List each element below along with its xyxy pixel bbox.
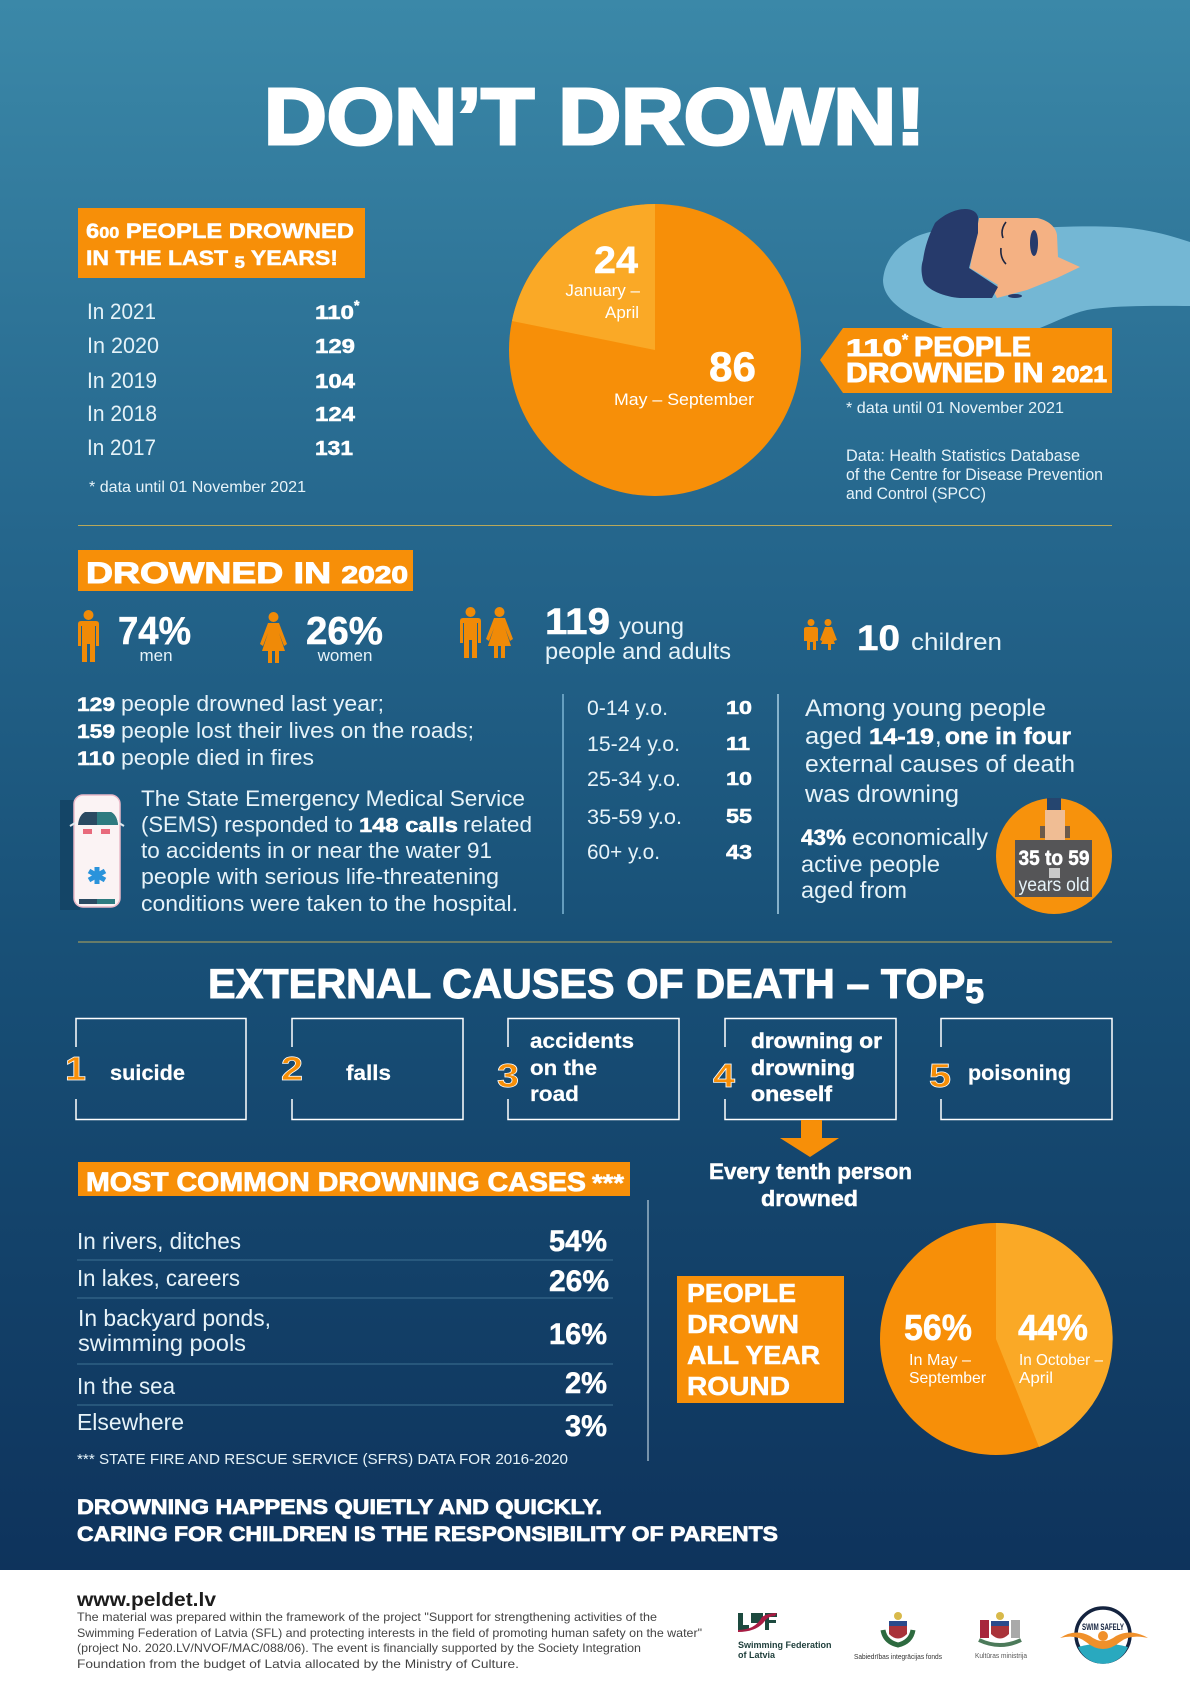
closing message: CARING FOR CHILDREN IS THE RESPONSIBILITY OF PARENTS <box>77 1523 778 1546</box>
logo: Swimming Federation of Latvia: Swimming Federation <box>738 1640 832 1650</box>
icon: woman <box>260 612 287 663</box>
text block: SEMS calls: related <box>463 812 532 837</box>
stat: men <box>78 610 191 665</box>
text block: young people: Among young people <box>805 695 1046 722</box>
yearly table <box>87 297 360 460</box>
yearly table: In 2017 <box>87 435 156 460</box>
cause 4: drowning <box>713 1018 896 1120</box>
callout: 110 people drowned in 2021: 110 <box>846 335 902 362</box>
heading: external causes of death: 5 <box>965 973 984 1011</box>
text block: SEMS calls: The State Emergency Medical Service <box>141 786 525 811</box>
panel: last 5 years <box>78 208 365 496</box>
logo: Ministry of Culture <box>975 1612 1028 1660</box>
stat: young people and adults: people and adults <box>545 638 731 664</box>
badge: 35 to 59 years old: years old <box>1018 875 1090 896</box>
text block: comparison of deaths: 129 <box>77 695 115 716</box>
pie chart: seasons: 56% <box>904 1307 972 1348</box>
callout: 110 people drowned in 2021: * <box>902 332 909 349</box>
text block: SEMS calls: conditions were taken to the hospital. <box>141 891 518 916</box>
text block: young people: aged <box>805 723 862 750</box>
yearly table: 124 <box>315 404 356 426</box>
icon: two children <box>804 619 837 650</box>
logo: Swim Safely <box>1060 1608 1148 1664</box>
stat: men: men <box>139 646 173 665</box>
heading: most common drowning cases: MOST COMMON DROWNING CASES <box>86 1167 586 1197</box>
box: people drown all year round: ROUND <box>687 1371 790 1401</box>
text block: young people: one in four <box>945 723 1071 749</box>
yearly table: In 2018 <box>87 401 157 426</box>
box: people drown all year round: PEOPLE <box>687 1278 796 1308</box>
text block: economically active: 43% <box>801 825 846 850</box>
heading: external causes of death: EXTERNAL CAUSES OF DEATH – TOP <box>208 960 976 1007</box>
pie chart: 2021 by season: April <box>605 303 639 322</box>
footnote: SFRS data: *** STATE FIRE AND RESCUE SERVICE (SFRS) DATA FOR 2016-2020 <box>77 1451 568 1468</box>
text block: economically active: economically <box>852 824 989 850</box>
note: every tenth person <box>709 1159 912 1211</box>
cause 3: accidents on the road: on the <box>530 1057 597 1080</box>
cause 4: drowning: 4 <box>713 1057 736 1094</box>
text block: comparison of deaths: people drowned last year; <box>121 691 384 716</box>
text block: SEMS calls: 148 calls <box>359 815 458 837</box>
age table: 15-24 y.o. <box>587 733 680 756</box>
text block: comparison of deaths: 159 <box>77 722 115 743</box>
pie chart: seasons: In October – <box>1019 1352 1103 1369</box>
source note <box>846 446 1103 503</box>
cause 4: drowning: drowning or <box>751 1030 882 1053</box>
logo: Ministry of Culture: Kultūras ministrija <box>975 1651 1028 1660</box>
stat: women: 26% <box>306 610 383 653</box>
logo: Swimming Federation of Latvia <box>738 1613 832 1660</box>
heading box: 600 people drowned: 600 PEOPLE DROWNED <box>86 220 354 243</box>
text block: comparison of deaths: people lost their lives on the roads; <box>121 718 474 743</box>
yearly table: In 2019 <box>87 368 157 393</box>
age table: 0-14 y.o. <box>587 697 668 720</box>
age table: 25-34 y.o. <box>587 768 681 791</box>
age table: 43 <box>726 842 752 864</box>
footer text: www.peldet.lv <box>76 1590 216 1611</box>
pie chart: seasons <box>880 1223 1113 1455</box>
cause 5: poisoning: poisoning <box>968 1062 1071 1085</box>
heading: drowned in 2020: DROWNED IN 2020 <box>86 557 408 590</box>
text block: SEMS calls <box>141 786 532 916</box>
text block: comparison of deaths: 110 <box>77 749 115 770</box>
text block: SEMS calls: (SEMS) responded to <box>141 812 353 837</box>
logo: Society Integration Foundation: Sabiedrības integrācijas fonds <box>854 1652 942 1661</box>
yearly table: 110 <box>315 303 354 324</box>
icon: man <box>78 610 99 662</box>
cause 3: accidents on the road: 3 <box>497 1057 519 1094</box>
text block: comparison of deaths <box>77 691 474 770</box>
text block: young people: was drowning <box>804 781 959 808</box>
pie chart: 2021 by season: May – September <box>614 390 754 409</box>
note: data until date: * data until 01 November 2021 <box>846 400 1064 417</box>
yearly table: 129 <box>315 336 355 358</box>
note: every tenth person: drowned <box>761 1186 858 1211</box>
pie chart: seasons: April <box>1019 1370 1053 1387</box>
callout: 110 people drowned in 2021: DROWNED IN 2021 <box>846 357 1107 388</box>
footer text: The material was prepared within the framework of the project "Support for strengthening activities of the <box>77 1610 657 1624</box>
badge: 35 to 59 years old <box>996 798 1112 914</box>
table: drowning locations: In lakes, careers <box>77 1265 240 1291</box>
table: drowning locations: 26% <box>549 1265 609 1298</box>
text block: young people: , <box>935 723 942 750</box>
table: drowning locations: 16% <box>549 1318 607 1351</box>
text block: young people: external causes of death <box>805 751 1075 778</box>
stat: young people and adults <box>460 601 731 664</box>
table: drowning locations <box>77 1225 613 1443</box>
heading box: 600 people drowned: IN THE LAST <box>86 247 216 270</box>
text block: economically active <box>801 824 989 903</box>
age table: 10 <box>726 769 752 789</box>
footer text: Swimming Federation of Latvia (SFL) and protecting interests in the field of promoting human safety on the water" <box>77 1626 702 1640</box>
cause 3: accidents on the road: accidents <box>530 1030 634 1053</box>
heading: most common drowning cases: *** <box>592 1170 625 1197</box>
box: people drown all year round <box>677 1276 844 1403</box>
yearly table: 131 <box>315 438 353 460</box>
stat: children: 10 <box>857 619 900 658</box>
stat: children: children <box>911 629 1002 656</box>
cause 2: falls <box>281 1018 463 1120</box>
heading box: 600 people drowned <box>78 208 365 278</box>
badge: 35 to 59 years old: 35 to 59 <box>1018 847 1090 870</box>
table: drowning locations: 3% <box>565 1410 607 1443</box>
age table: 10 <box>726 698 752 718</box>
cause 1: suicide <box>65 1018 246 1120</box>
yearly table: * <box>354 297 360 313</box>
table: drowning locations: In rivers, ditches <box>77 1228 241 1254</box>
yearly table: In 2020 <box>87 333 159 358</box>
cause 5: poisoning <box>929 1018 1112 1120</box>
pie chart: 2021 by season <box>509 204 801 496</box>
table: drowning locations: In backyard ponds, <box>78 1305 271 1331</box>
stat: young people and adults: 119 <box>545 601 610 642</box>
stat: children <box>804 619 1002 658</box>
age table: 60+ y.o. <box>587 841 660 864</box>
closing message <box>77 1496 778 1546</box>
age table: 11 <box>726 734 750 754</box>
cause 2: falls: 2 <box>281 1050 303 1087</box>
heading box: 600 people drowned: YEARS! <box>245 247 338 270</box>
pie chart: 2021 by season: 86 <box>709 343 756 390</box>
source note: of the Centre for Disease Prevention <box>846 465 1103 484</box>
cause 5: poisoning: 5 <box>929 1057 951 1094</box>
age table <box>587 697 752 864</box>
cause 3: accidents on the road: road <box>530 1083 579 1106</box>
stat: young people and adults: young <box>619 613 684 639</box>
box: people drown all year round: DROWN <box>687 1309 799 1339</box>
box: people drown all year round: ALL YEAR <box>687 1340 820 1370</box>
arrow: from drowning to note <box>780 1120 839 1157</box>
footer text: (project No. 2020.LV/NVOF/MAC/088/06). The event is financially supported by the Society Integration <box>77 1641 641 1655</box>
cause 4: drowning: drowning <box>751 1057 855 1080</box>
stat: men: 74% <box>118 610 191 653</box>
table: drowning locations: 54% <box>549 1225 607 1258</box>
icon: ambulance <box>60 795 124 910</box>
text block: young people <box>804 695 1075 808</box>
footnote: * data until 01 November 2021 <box>89 479 306 496</box>
icon: man and woman <box>460 607 513 658</box>
yearly table: In 2021 <box>87 299 156 324</box>
text block: comparison of deaths: people died in fires <box>121 745 314 770</box>
age table: 35-59 y.o. <box>587 806 682 829</box>
closing message: DROWNING HAPPENS QUIETLY AND QUICKLY. <box>77 1496 602 1519</box>
callout: 110 people drowned in 2021 <box>820 328 1112 393</box>
text block: young people: 14-19 <box>869 724 934 749</box>
text block: economically active: active people <box>801 851 940 877</box>
table: drowning locations: Elsewhere <box>77 1409 184 1435</box>
cause 1: suicide: 1 <box>65 1050 86 1087</box>
text block: economically active: aged from <box>801 877 907 903</box>
table: drowning locations: 2% <box>565 1367 607 1400</box>
table: drowning locations: In the sea <box>77 1373 175 1399</box>
table: drowning locations: swimming pools <box>78 1330 246 1356</box>
footer text <box>76 1590 702 1671</box>
pie chart: seasons: September <box>909 1370 987 1387</box>
heading box: 600 people drowned: 5 <box>235 253 245 272</box>
logo: Swimming Federation of Latvia: of Latvia <box>738 1650 776 1660</box>
cause 4: drowning: oneself <box>751 1083 833 1106</box>
yearly table: 104 <box>315 371 356 393</box>
stat: women <box>260 610 383 665</box>
title: DON’T DROWN! <box>264 72 925 161</box>
age table: 55 <box>726 806 752 828</box>
stat: women: women <box>317 646 372 665</box>
illustration: drowning head in water <box>883 209 1190 328</box>
panel: top 5 causes <box>65 1018 1112 1120</box>
source note: Data: Health Statistics Database <box>846 446 1080 465</box>
callout: 110 people drowned in 2021: PEOPLE <box>914 331 1031 362</box>
cause 1: suicide: suicide <box>110 1062 185 1085</box>
note: every tenth person: Every tenth person <box>709 1159 912 1184</box>
logo: Swim Safely: SWIM SAFELY <box>1082 1622 1124 1633</box>
text block: SEMS calls: to accidents in or near the water 91 <box>141 838 492 863</box>
logo: Society Integration Foundation <box>854 1612 942 1661</box>
cause 3: accidents on the road <box>497 1018 679 1120</box>
pie chart: 2021 by season: 24 <box>594 240 638 282</box>
source note: and Control (SPCC) <box>846 484 986 503</box>
text block: SEMS calls: people with serious life-threatening <box>141 864 499 889</box>
pie chart: 2021 by season: January – <box>565 281 641 300</box>
pie chart: seasons: 44% <box>1018 1307 1088 1348</box>
pie chart: seasons: In May – <box>909 1352 971 1369</box>
footer text: Foundation from the budget of Latvia allocated by the Ministry of Culture. <box>77 1657 519 1671</box>
cause 2: falls: falls <box>346 1062 391 1085</box>
